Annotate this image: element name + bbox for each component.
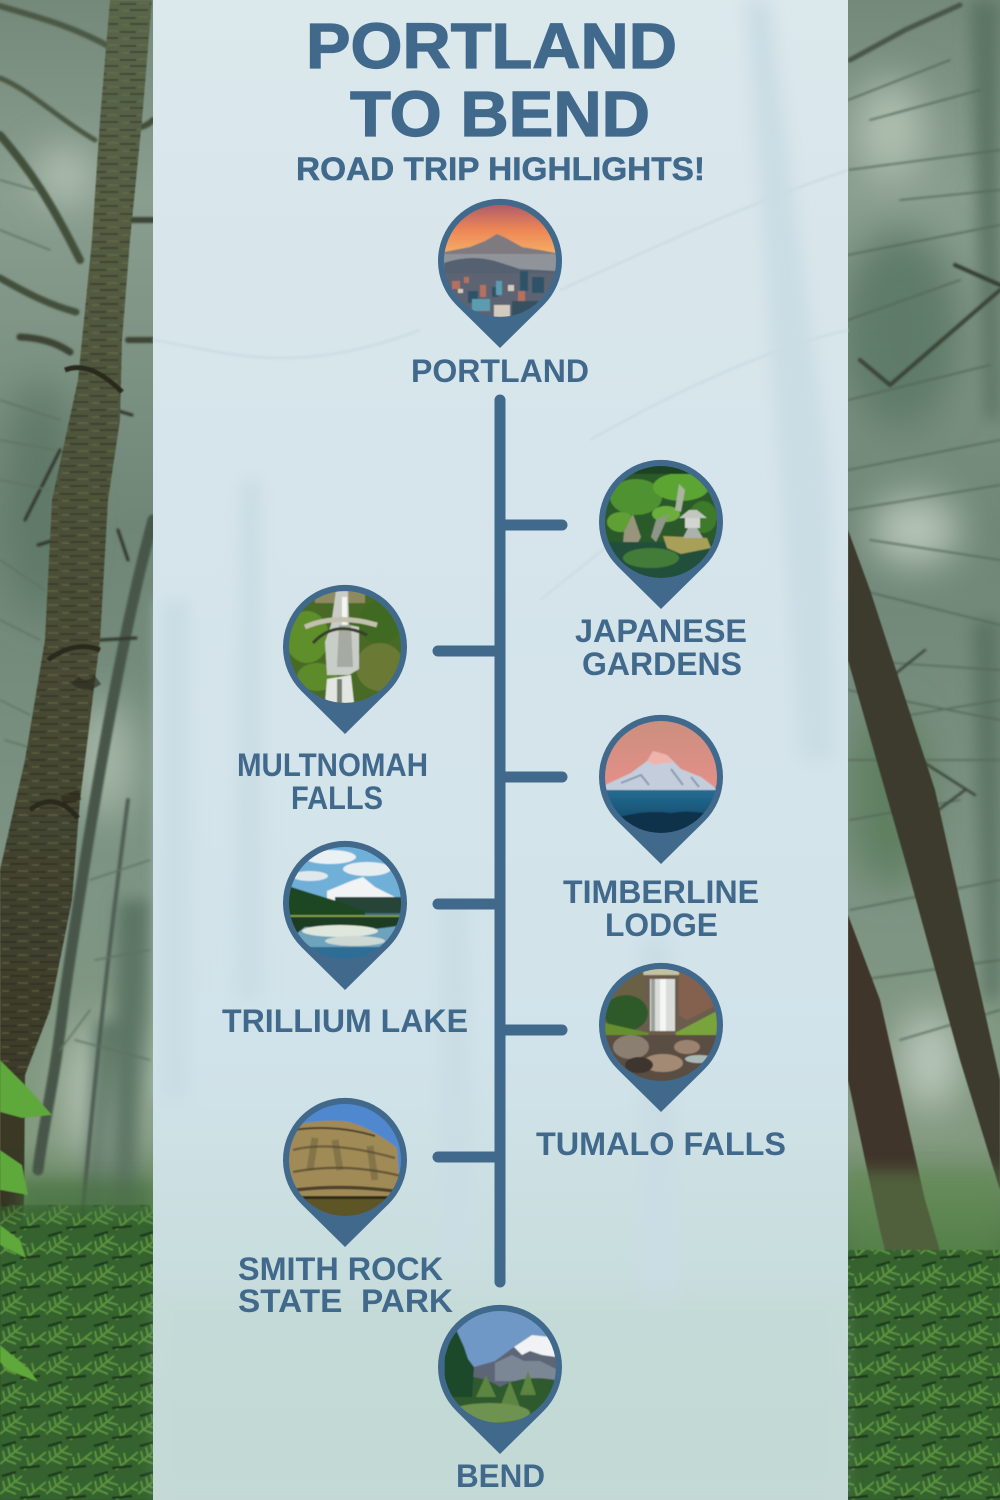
pin: Smith Rock State Park xyxy=(283,1098,407,1247)
label: Japanese Gardens: GARDENS xyxy=(582,646,742,682)
pin: Tumalo Falls xyxy=(599,963,723,1112)
lantern xyxy=(679,510,707,518)
secondary thin trunks xyxy=(38,520,153,1170)
pin: Portland xyxy=(438,199,562,348)
label: Japanese Gardens: JAPANESE xyxy=(575,613,747,649)
label: Multnomah Falls: MULTNOMAH xyxy=(237,747,428,783)
ferns xyxy=(0,1205,1000,1500)
right leaning trunks xyxy=(848,530,1000,1190)
bright leaves xyxy=(0,1060,52,1382)
title: PORTLAND xyxy=(306,10,677,82)
pin: Multnomah Falls xyxy=(283,585,407,734)
label: Smith Rock State Park: SMITH ROCK xyxy=(238,1251,443,1287)
title: TO BEND xyxy=(350,78,650,150)
label: Multnomah Falls xyxy=(237,747,428,816)
label: Timberline Lodge: LODGE xyxy=(605,907,718,943)
main left trunk xyxy=(0,0,152,1430)
title xyxy=(306,10,677,150)
label: Bend: BEND xyxy=(456,1458,545,1494)
label: Tumalo Falls: TUMALO FALLS xyxy=(536,1126,786,1162)
timeline xyxy=(438,400,562,1282)
label: Smith Rock State Park: STATE PARK xyxy=(238,1283,453,1319)
pin: Japanese Gardens xyxy=(599,460,723,609)
label: Timberline Lodge xyxy=(563,874,759,943)
distant trunks xyxy=(85,0,1000,1230)
right thin branches xyxy=(860,290,1000,385)
label: Japanese Gardens xyxy=(575,613,747,682)
subtitle: ROAD TRIP HIGHLIGHTS! xyxy=(296,151,705,187)
pin: Bend xyxy=(438,1305,562,1454)
label: Smith Rock State Park xyxy=(238,1251,453,1319)
label: Timberline Lodge: TIMBERLINE xyxy=(563,874,759,910)
label: Trillium Lake: TRILLIUM LAKE xyxy=(222,1003,468,1039)
green understory haze xyxy=(20,1170,1000,1300)
label: Portland: PORTLAND xyxy=(411,353,589,389)
pin: Timberline Lodge xyxy=(599,715,723,864)
label: Multnomah Falls: FALLS xyxy=(291,780,383,816)
pin: Trillium Lake xyxy=(283,841,407,990)
translucent central panel xyxy=(153,0,848,1500)
left branches xyxy=(0,6,112,48)
